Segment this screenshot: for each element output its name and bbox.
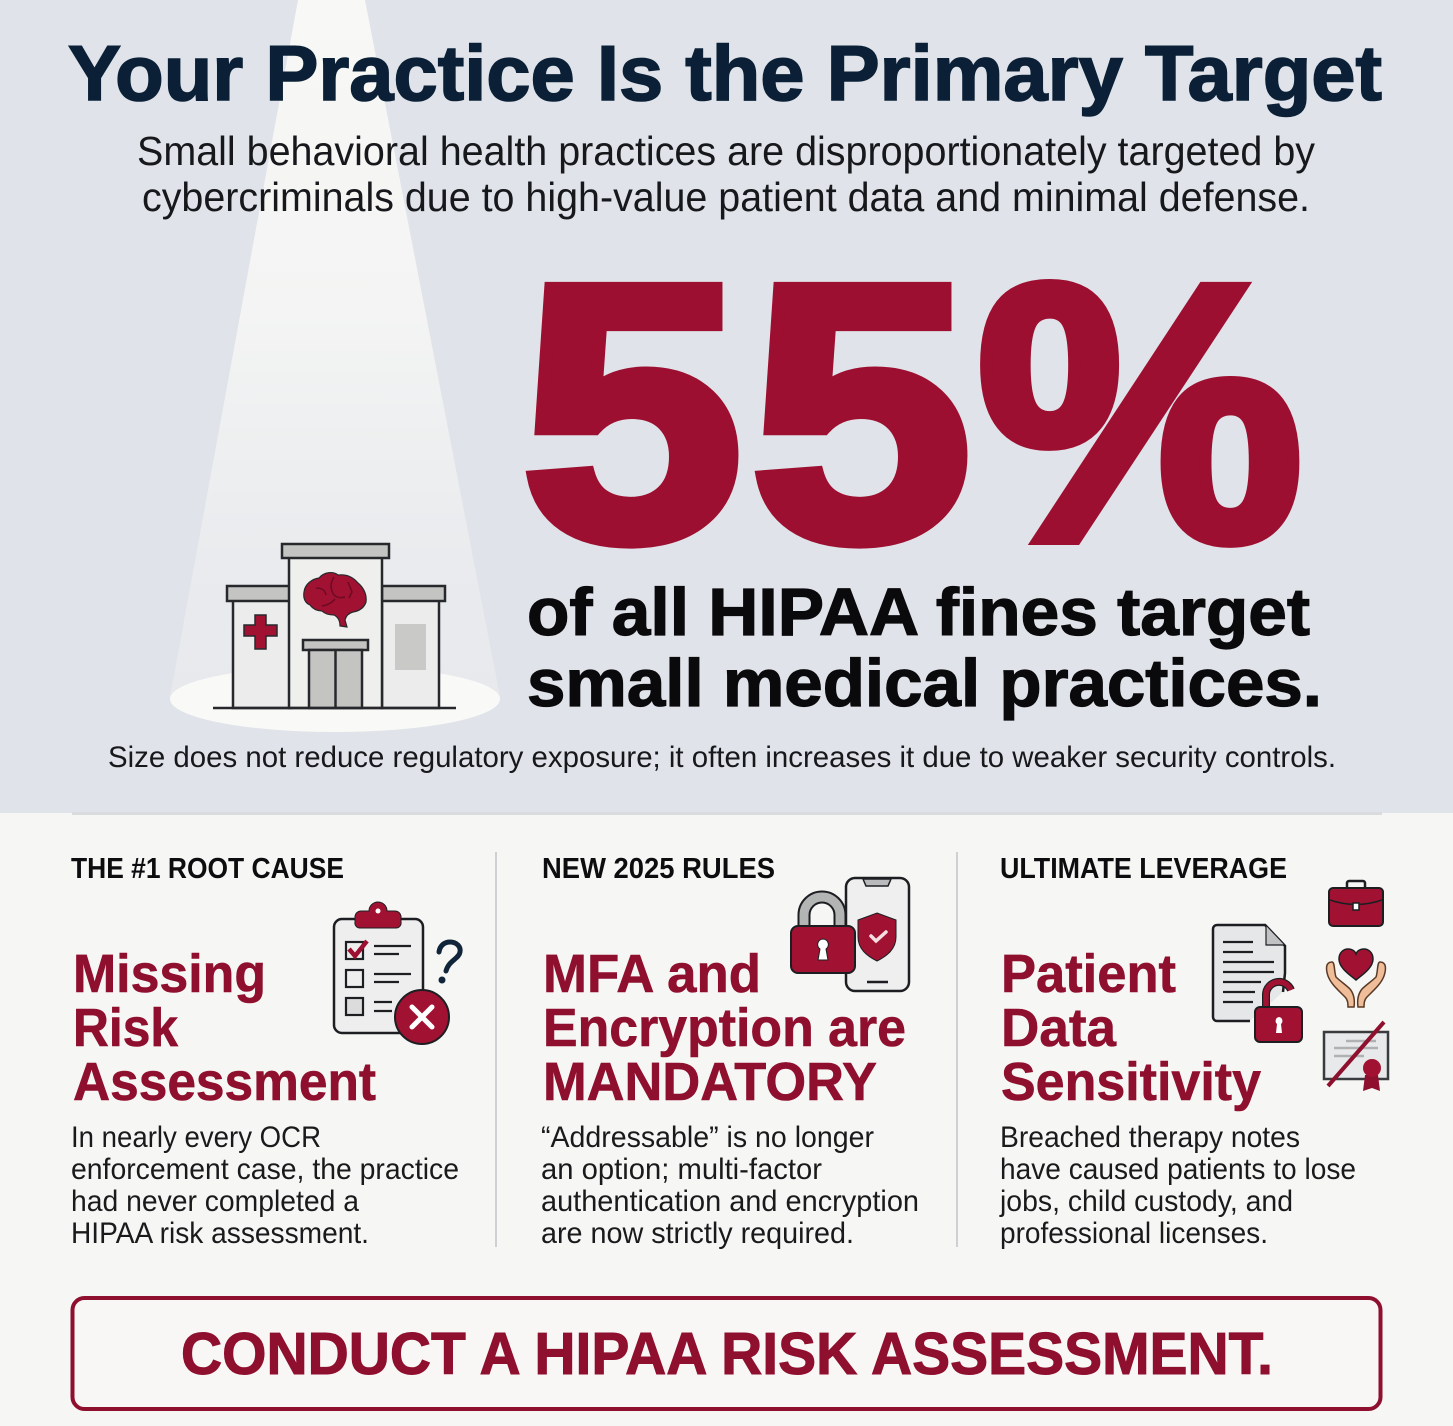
new rules body	[541, 1121, 919, 1250]
root cause kicker: THE #1 ROOT CAUSE	[71, 853, 344, 885]
new rules heading: MFA and	[543, 944, 761, 1004]
divider	[72, 812, 1382, 815]
leverage body: Breached therapy notes	[1000, 1121, 1300, 1154]
leverage body: jobs, child custody, and	[999, 1185, 1293, 1218]
icon: briefcase	[1329, 881, 1383, 926]
column separators	[495, 852, 958, 1247]
icon: document with open lock	[1213, 925, 1302, 1042]
big statistic: 55%: 5	[521, 210, 743, 617]
spotlight pool	[170, 666, 500, 732]
icon: clipboard checklist with X	[334, 902, 460, 1044]
background: bottom section	[0, 813, 1453, 1426]
statistic caption: of all HIPAA fines target	[527, 575, 1310, 650]
big statistic: 55%	[521, 210, 1303, 617]
big statistic: 55%: %	[977, 210, 1303, 617]
root cause body: had never completed a	[71, 1185, 359, 1218]
new rules body: an option; multi-factor	[541, 1153, 822, 1186]
panel: root cause	[71, 853, 460, 1250]
big statistic: 55%: 5	[750, 210, 972, 617]
new rules kicker: NEW 2025 RULES	[542, 853, 775, 885]
new rules heading	[543, 944, 906, 1112]
root cause heading: Missing	[73, 944, 266, 1004]
statistic caption: small medical practices.	[527, 646, 1322, 721]
root cause body: In nearly every OCR	[71, 1121, 321, 1154]
panel: ultimate leverage	[999, 853, 1388, 1250]
root cause body	[71, 1121, 459, 1250]
subtitle: Small behavioral health practices are disproportionately targeted by	[137, 128, 1315, 174]
root cause body: enforcement case, the practice	[71, 1153, 459, 1186]
leverage heading: Patient	[1001, 944, 1176, 1004]
panel: new rules	[541, 853, 919, 1250]
new rules heading: MANDATORY	[543, 1052, 877, 1112]
icon: padlock and phone with shield	[791, 878, 909, 991]
icon: clinic building with brain	[213, 544, 456, 708]
root cause heading	[73, 944, 376, 1112]
leverage body	[999, 1121, 1356, 1250]
root cause heading: Risk	[73, 998, 179, 1058]
new rules body: authentication and encryption	[541, 1185, 919, 1218]
call to action button	[72, 1298, 1380, 1409]
spotlight beam	[170, 0, 500, 697]
new rules body: “Addressable” is no longer	[541, 1121, 874, 1154]
leverage heading: Sensitivity	[1001, 1052, 1261, 1112]
call to action button: CONDUCT A HIPAA RISK ASSESSMENT.	[181, 1321, 1273, 1387]
subtitle: cybercriminals due to high-value patient data and minimal defense.	[142, 174, 1310, 220]
title: Your Practice Is the Primary Target	[68, 29, 1382, 117]
root cause heading: Assessment	[73, 1052, 376, 1112]
new rules heading: Encryption are	[543, 998, 906, 1058]
leverage body: have caused patients to lose	[1000, 1153, 1356, 1186]
leverage kicker: ULTIMATE LEVERAGE	[1000, 853, 1287, 885]
new rules body: are now strictly required.	[541, 1217, 854, 1250]
note under statistic: Size does not reduce regulatory exposure; it often increases it due to weaker security controls.	[108, 741, 1336, 774]
subtitle	[137, 128, 1315, 220]
root cause body: HIPAA risk assessment.	[71, 1217, 369, 1250]
icon: hands holding heart	[1327, 949, 1385, 1007]
leverage heading	[1001, 944, 1261, 1112]
background: top section	[0, 0, 1453, 813]
icon: crossed-out certificate	[1324, 1022, 1388, 1091]
leverage body: professional licenses.	[1000, 1217, 1268, 1250]
statistic caption	[527, 575, 1322, 721]
leverage heading: Data	[1001, 998, 1117, 1058]
